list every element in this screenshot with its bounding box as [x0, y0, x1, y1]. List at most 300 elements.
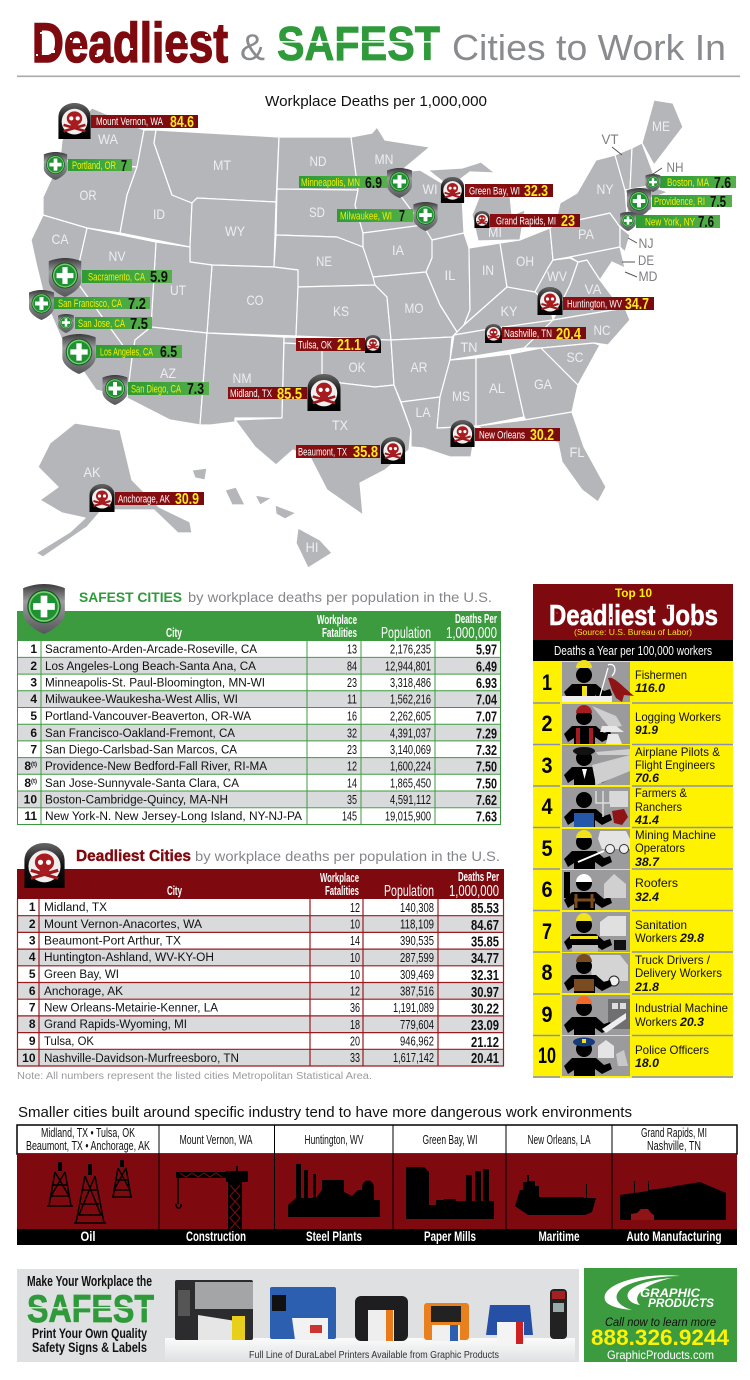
state labels: KS [333, 303, 349, 319]
job 2 logging: Logging Workers [635, 710, 721, 724]
row 1: Midland, TX [44, 902, 107, 914]
row 6: 6 [30, 726, 37, 740]
job 9 industrial machine: 20.3 [679, 1015, 704, 1029]
row 5: Green Bay, WI [44, 969, 119, 981]
job 10 police: 18.0 [635, 1056, 659, 1070]
row 5: 5 [29, 967, 36, 981]
row 1: 140,308 [400, 901, 434, 915]
deadliest table header [17, 869, 504, 900]
pin: Sacramento: Sacramento, CA [88, 272, 145, 284]
job 7 sanitation [542, 912, 704, 952]
state labels: WA [98, 131, 119, 147]
row 4 [30, 692, 497, 708]
job 3 pilots [542, 745, 720, 785]
row 10: 7.62 [476, 793, 497, 809]
pin: New York: New York, NY [645, 216, 695, 228]
row 10 [24, 792, 497, 809]
pin: Sacramento: 5.9 [150, 269, 168, 286]
industry: auto manufacturing: Nashville, TN [647, 1139, 701, 1153]
pin: Grand Rapids: Grand Rapids, MI [496, 216, 556, 228]
state labels: WV [547, 268, 568, 284]
state labels: MS [452, 388, 470, 404]
job 7 sanitation: Workers [635, 931, 677, 945]
pin: San Diego: San Diego, CA [131, 384, 181, 396]
job 2 logging: 2 [542, 711, 552, 736]
row 10: 10 [24, 792, 37, 806]
row 8 [29, 1017, 499, 1034]
state labels: MO [404, 300, 424, 316]
industry heading: Smaller cities built around specific industry tend to have more dangerous work environments [18, 1105, 632, 1121]
row 9: 20 [350, 1034, 360, 1048]
pin: Providence [627, 188, 732, 217]
row 11: 19,015,900 [385, 810, 431, 824]
safest table header: Workplace [317, 613, 357, 627]
ad subtext: Safety Signs & Labels [32, 1339, 147, 1355]
pin: Los Angeles [62, 334, 182, 374]
row 8: 12 [347, 760, 357, 774]
state labels: WY [225, 223, 246, 239]
job 5 mining [542, 828, 716, 869]
job 9 industrial machine: Industrial Machine [635, 1001, 728, 1015]
row 8: Grand Rapids-Wyoming, MI [44, 1019, 187, 1031]
row 3: 390,535 [400, 934, 434, 948]
pin: Los Angeles: Los Angeles, CA [100, 346, 153, 358]
row 2: 12,944,801 [385, 660, 431, 674]
job 4 farmers: Ranchers [635, 800, 682, 814]
icon: steel plant [288, 1164, 380, 1217]
job 8 truck drivers: 21.8 [634, 980, 659, 994]
panel: safest cities table [17, 584, 501, 826]
job 7 sanitation: Sanitation [635, 918, 687, 932]
row 5: 2,262,605 [390, 710, 431, 724]
row 6: 12 [350, 984, 360, 998]
job 10 police: 10 [538, 1043, 556, 1068]
row 3 [30, 676, 497, 692]
row 7: 36 [350, 1001, 360, 1015]
row 4: 7.04 [476, 692, 497, 708]
row 2: 84 [347, 660, 357, 674]
phone number: 888.326.9244 [591, 1325, 730, 1350]
job 2 logging: 91.9 [635, 723, 658, 737]
deadliest table title: Deadliest Cities [76, 848, 191, 865]
deadliest table header: City [167, 884, 182, 898]
row 4 [29, 950, 499, 967]
pin: Tulsa: Tulsa, OK [298, 340, 332, 352]
state labels: VT [602, 131, 619, 147]
safest table title [79, 589, 492, 605]
state labels: MD [638, 268, 658, 284]
pin: Tulsa: 21.1 [337, 337, 361, 354]
row 6: 32 [347, 726, 357, 740]
state labels: OK [348, 359, 366, 375]
pin: Anchorage: 30.9 [175, 491, 199, 508]
printer 5 [486, 1305, 533, 1344]
job 4 farmers: 41.4 [634, 813, 659, 827]
row 3 [29, 934, 499, 950]
pin: Portland: Portland, OR [72, 160, 116, 172]
pin: Tulsa [296, 335, 381, 354]
deadliest table title [76, 848, 500, 865]
map of the United States [31, 100, 684, 568]
row 7 [29, 1000, 499, 1018]
icon: paper mill [406, 1167, 494, 1219]
ad heading: Make Your Workplace the [27, 1273, 152, 1290]
job 9 industrial machine [542, 995, 728, 1035]
map: Alaska [36, 423, 192, 557]
row 2: 118,109 [400, 918, 434, 932]
jobs header: Top 10 [615, 586, 652, 600]
row 9: 1,865,450 [390, 776, 431, 790]
pin: San Diego: 7.3 [187, 381, 204, 398]
job 5 mining: Operators [635, 841, 685, 855]
row 7: 3,140,069 [390, 743, 431, 757]
row 4: 4 [29, 950, 36, 964]
row 11: 145 [342, 810, 357, 824]
row 2: 2 [29, 917, 36, 931]
state labels: NY [596, 181, 614, 197]
pin: Beaumont: Beaumont, TX [298, 446, 347, 458]
pin: New Orleans: New Orleans [479, 430, 525, 442]
job 10 police: Police Officers [635, 1043, 709, 1057]
row 5: Portland-Vancouver-Beaverton, OR-WA [45, 711, 251, 723]
ad subtext: Print Your Own Quality [32, 1325, 147, 1341]
row 7: New Orleans-Metairie-Kenner, LA [44, 1002, 218, 1014]
row 3: Beaumont-Port Arthur, TX [44, 936, 181, 948]
row 10: 4,591,112 [390, 793, 431, 807]
row 2 [29, 917, 499, 934]
state labels: TX [332, 417, 349, 433]
row 11: 11 [24, 809, 37, 823]
job 8 truck drivers: Truck Drivers / [635, 953, 711, 967]
pin: Providence: Providence, RI [654, 196, 705, 208]
job 8 truck drivers [542, 953, 722, 994]
pin: Portland: 7 [121, 158, 127, 175]
deadliest table title: by workplace deaths per population in the U.S. [195, 849, 500, 864]
row 11: New York-N. New Jersey-Long Island, NY-NJ-PA [45, 811, 302, 823]
row 10: Nashville-Davidson-Murfreesboro, TN [44, 1053, 239, 1065]
job 10 police [538, 1036, 709, 1076]
pin: San Jose: 7.5 [130, 316, 148, 333]
row 1: 85.53 [471, 901, 499, 917]
row 8: 7.50 [476, 760, 497, 776]
row 1: 5.97 [476, 642, 497, 658]
industry: oil: Beaumont, TX • Anchorage, AK [26, 1139, 150, 1153]
job 6 roofers: 32.4 [635, 890, 659, 904]
state labels: TN [460, 339, 478, 355]
map heading: Workplace Deaths per 1,000,000 [265, 93, 487, 110]
state labels [52, 118, 684, 555]
row 2 [30, 659, 497, 676]
row 9: (t) [31, 779, 37, 785]
pin: Minneapolis: 6.9 [365, 175, 382, 192]
website: GraphicProducts.com [607, 1348, 714, 1362]
state labels: AR [410, 359, 428, 375]
state labels: NM [232, 370, 252, 386]
row 6: 387,516 [400, 984, 434, 998]
row 3: 3,318,486 [390, 676, 431, 690]
row 1: 1 [30, 642, 37, 656]
industry: auto manufacturing: Grand Rapids, MI [641, 1126, 707, 1140]
row 5 [29, 967, 499, 984]
state labels: FL [570, 444, 585, 460]
job 6 roofers [542, 870, 678, 910]
ad subtext [32, 1325, 147, 1355]
icon: ship [515, 1175, 596, 1215]
row 3: 35.85 [471, 934, 499, 950]
pin: Midland: 85.5 [277, 386, 302, 403]
state labels: LA [416, 404, 431, 420]
row 1: Sacramento-Arden-Arcade-Roseville, CA [45, 644, 257, 656]
row 1 [30, 642, 497, 658]
row 8: 8 [24, 759, 31, 773]
ad word: SAFEST: SAFEST [27, 1288, 154, 1331]
row 9: Tulsa, OK [44, 1036, 94, 1048]
row 3: 23 [347, 676, 357, 690]
safest table header: City [166, 626, 182, 640]
pin: Huntington: Huntington, WV [567, 298, 622, 310]
row 6: 7.29 [476, 726, 497, 742]
state labels: NC [594, 322, 610, 338]
state labels: OR [80, 187, 96, 203]
row 6: 6 [29, 984, 36, 998]
job 5 mining: 5 [542, 836, 552, 861]
pin: San Jose [58, 314, 152, 333]
row 8: 779,604 [400, 1018, 434, 1032]
row 8 [24, 759, 497, 776]
row 10: 33 [350, 1051, 360, 1065]
pin: Grand Rapids [474, 211, 580, 230]
deadliest table header: Fatalities [325, 884, 359, 898]
job 5 mining: 38.7 [635, 855, 660, 869]
panel: call to action [584, 1268, 737, 1362]
job 3 pilots: 3 [542, 753, 552, 778]
safest table header: Population [381, 625, 431, 642]
state labels: HI [306, 539, 318, 555]
row 4: Milwaukee-Waukesha-West Allis, WI [45, 694, 238, 706]
row 9 [24, 776, 497, 792]
pin: San Jose: San Jose, CA [78, 318, 125, 330]
pin: Milwaukee [337, 202, 438, 231]
row 1: 2,176,235 [390, 642, 431, 656]
pin: Portland [44, 152, 132, 180]
industry: maritime [515, 1133, 596, 1244]
state labels: SD [309, 204, 325, 220]
row 6: San Francisco-Oakland-Fremont, CA [45, 728, 235, 740]
table note: Note: All numbers represent the listed cities Metropolitan Statistical Area. [17, 1071, 372, 1082]
state labels: MI [488, 224, 502, 240]
map: Hawaii [192, 468, 332, 568]
row 10: Boston-Cambridge-Quincy, MA-NH [45, 794, 228, 806]
state labels: NE [316, 253, 332, 269]
jobs header: Deadliest Jobs [549, 600, 718, 632]
state labels: CO [246, 292, 264, 308]
jobs header [533, 584, 733, 661]
jobs header: (Source: U.S. Bureau of Labor) [574, 627, 692, 637]
icon: crane [176, 1166, 248, 1229]
title word: Deadliest: Deadliest [32, 11, 228, 74]
pin: New York: 7.6 [698, 214, 714, 231]
job 1 fishermen [542, 660, 687, 702]
row 6 [29, 984, 499, 1001]
row 7: 30.22 [471, 1002, 499, 1018]
row 11 [24, 809, 497, 826]
row 3: 6.93 [476, 676, 497, 692]
row 5: 32.31 [471, 968, 499, 984]
state labels: AL [489, 380, 505, 396]
state labels: UT [170, 282, 186, 298]
pin: Boston: 7.6 [714, 175, 731, 192]
job 2 logging [542, 704, 721, 744]
row 2: Mount Vernon-Anacortes, WA [44, 919, 202, 931]
safest table header: Fatalities [322, 626, 357, 640]
printer 2 [270, 1287, 336, 1340]
pin: Midland: Midland, TX [230, 388, 272, 400]
industry: construction: Construction [186, 1229, 246, 1244]
row 5: 10 [350, 968, 360, 982]
state labels: DE [638, 252, 654, 268]
ad caption: Full Line of DuraLabel Printers Available from Graphic Products [249, 1350, 499, 1361]
industry: maritime: Maritime [538, 1229, 580, 1244]
pin: Nashville: 20.4 [556, 326, 581, 343]
pin: Los Angeles: 6.5 [160, 344, 177, 361]
row 10 [22, 1051, 499, 1067]
row 9: 946,962 [400, 1034, 434, 1048]
row 2: 84.67 [471, 918, 499, 934]
row 9: 21.12 [471, 1035, 499, 1051]
row 7: 1,191,089 [393, 1001, 434, 1015]
row 7: 7 [29, 1000, 36, 1014]
row 7 [30, 742, 497, 759]
row 2: 6.49 [476, 660, 497, 676]
pin: New Orleans [450, 420, 560, 447]
state labels: PA [578, 226, 595, 242]
row 1 [29, 900, 499, 917]
industry: maritime: New Orleans, LA [528, 1133, 591, 1147]
row 8: (t) [31, 762, 37, 768]
pin: Sacramento [49, 258, 172, 297]
printer 4 [424, 1303, 469, 1341]
pin: Boston: Boston, MA [667, 177, 709, 189]
panel: top 10 deadliest jobs [533, 584, 733, 1078]
row 2: 10 [350, 918, 360, 932]
job 1 fishermen: Fishermen [635, 668, 687, 682]
row 3: 3 [29, 934, 36, 948]
row 6 [30, 726, 497, 742]
row 3: Minneapolis-St. Paul-Bloomington, MN-WI [45, 678, 265, 690]
row 10: 1,617,142 [393, 1051, 434, 1065]
pin: New Orleans: 30.2 [530, 427, 554, 444]
row 9: 9 [29, 1034, 36, 1048]
row 9 [29, 1034, 499, 1051]
job 6 roofers: 6 [542, 877, 552, 902]
pin: San Diego [102, 375, 209, 405]
panel: deadliest cities table [17, 843, 504, 1082]
pin: Green Bay [441, 177, 553, 203]
pin: Beaumont [296, 437, 405, 464]
pin: Midland [228, 374, 341, 411]
pin: Green Bay: 32.3 [524, 183, 548, 200]
printer 1 [175, 1280, 253, 1340]
industry: construction: Mount Vernon, WA [180, 1133, 253, 1147]
row 10: 10 [22, 1051, 36, 1065]
row 7: 7 [30, 742, 37, 756]
row 5 [30, 709, 497, 726]
job 3 pilots: 70.6 [635, 771, 659, 785]
state labels: NV [108, 248, 126, 264]
row 1: 13 [347, 642, 357, 656]
row 5: 16 [347, 710, 357, 724]
icon: deadliest skull [24, 843, 65, 888]
row 9: 7.50 [476, 776, 497, 792]
industry: paper mills: Paper Mills [424, 1229, 476, 1244]
deadliest table header: Workplace [320, 871, 359, 885]
state labels: IL [444, 267, 456, 283]
industry: steel plants: Huntington, WV [304, 1133, 364, 1147]
industry: construction [176, 1133, 253, 1244]
job 3 pilots: Airplane Pilots & [635, 745, 720, 759]
row 4: 10 [350, 951, 360, 965]
state labels: WI [422, 181, 438, 197]
pin: San Francisco: 7.2 [128, 296, 146, 313]
row 10: 20.41 [471, 1051, 499, 1067]
pin: Nashville: Nashville, TN [504, 328, 552, 340]
panel: industries [17, 1125, 737, 1245]
industry: steel plants [288, 1133, 380, 1244]
pin: Boston [646, 174, 736, 192]
job 4 farmers: 4 [542, 794, 553, 819]
state labels: NH [666, 159, 684, 175]
title ampersand: & [240, 27, 265, 68]
logo: Graphic Products: GRAPHIC [640, 1286, 700, 1300]
job 5 mining: Mining Machine [635, 828, 716, 842]
job 1 fishermen: 116.0 [635, 681, 665, 695]
row 8: 23.09 [471, 1018, 499, 1034]
pin: New York [620, 212, 720, 231]
safest table header [17, 611, 501, 642]
row 2: Los Angeles-Long Beach-Santa Ana, CA [45, 661, 256, 673]
pin: Grand Rapids: 23 [561, 213, 575, 230]
state labels: AK [84, 464, 101, 480]
deadliest table rows [17, 899, 504, 1067]
row 5: 7.07 [476, 710, 497, 726]
job 4 farmers: Farmers & [635, 786, 687, 800]
call text: Call now to learn more [605, 1315, 716, 1329]
pin: Milwaukee: Milwaukee, WI [340, 210, 392, 222]
row 5: 5 [30, 709, 37, 723]
job 3 pilots: Flight Engineers [635, 758, 715, 772]
printer 3 [355, 1296, 408, 1341]
state labels: IA [392, 242, 405, 258]
state labels: MN [374, 151, 394, 167]
job 8 truck drivers: 8 [542, 960, 552, 985]
job 1 fishermen: 1 [542, 670, 552, 695]
state labels: IN [482, 262, 494, 278]
state labels: KY [500, 303, 518, 319]
row 4: Huntington-Ashland, WV-KY-OH [44, 952, 214, 964]
state labels: OH [516, 253, 534, 269]
title word: SAFEST: SAFEST [277, 18, 440, 71]
pin: Anchorage: Anchorage, AK [118, 494, 170, 506]
safest table title: SAFEST CITIES [79, 589, 182, 605]
job 4 farmers [542, 786, 687, 827]
job 8 truck drivers: Delivery Workers [635, 966, 722, 980]
logo: Graphic Products: PRODUCTS [648, 1296, 714, 1310]
title rest: Cities to Work In [452, 27, 726, 68]
row 5: 309,469 [400, 968, 434, 982]
row 8: Providence-New Bedford-Fall River, RI-MA [45, 761, 267, 773]
row 7: San Diego-Carlsbad-San Marcos, CA [45, 744, 237, 756]
row 4: 287,599 [400, 951, 434, 965]
